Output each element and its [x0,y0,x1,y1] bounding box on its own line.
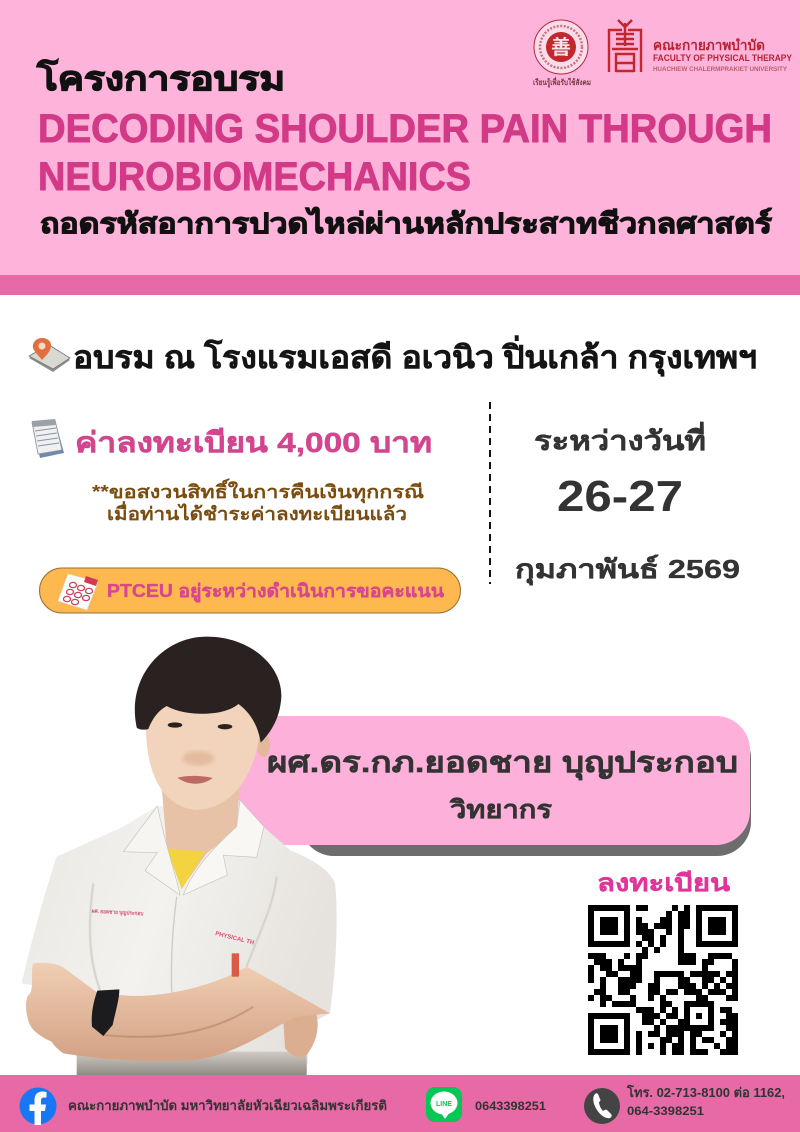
footer: phone numbers [626,1084,785,1118]
pocket emblem [232,953,239,977]
shirt [167,848,205,889]
speaker role: วิทยากร [449,796,553,824]
right hand behind [283,1010,318,1057]
icon: notepad [32,419,64,458]
footer: line id: 0643398251 [475,1099,546,1113]
venue: อบรม ณ โรงแรมเอสดี อเวนิว ปิ่นเกล้า กรุงเทพฯ [73,335,757,377]
title: English: NEUROBIOMECHANICS [38,155,471,199]
forearm and left hand [26,963,330,1061]
footer band [0,1075,800,1132]
footer: phone numbers: โทร. 02-713-8100 ต่อ 1162, [626,1084,785,1100]
speaker name: ผศ.ดร.กภ.ยอดชาย บุญประกอบ [267,747,738,780]
faculty logo mark [609,20,641,72]
coat [22,800,337,1075]
ear [257,733,270,757]
dashed divider [489,402,491,584]
title: English: DECODING SHOULDER PAIN THROUGH [38,107,772,151]
event dates: 26-27 [557,472,683,521]
faculty name: คณะกายภาพบำบัด [653,37,765,53]
face [146,690,260,810]
university seal logo: เรียนรู้เพื่อรับใช้สังคม [533,76,591,88]
icon: facebook [20,1088,56,1125]
collars [123,806,180,895]
faculty name: FACULTY OF PHYSICAL THERAPY [653,53,792,63]
university seal logo [533,20,591,88]
event dates: ระหว่างวันที่ [534,421,706,456]
icon: LINE: LINE [436,1101,452,1108]
event dates [515,421,740,586]
PTCEU pill [40,568,460,613]
hair [135,637,281,743]
event dates: กุมภาพันธ์ 2569 [515,554,740,586]
title: Thai subtitle: ถอดรหัสอาการปวดไหล่ผ่านหลักประสาทชีวกลศาสตร์ [40,207,772,239]
faculty name: HUACHIEW CHALERMPRAKIET UNIVERSITY [653,66,788,73]
faculty name [653,37,792,73]
header band [0,0,800,295]
eyes [168,722,232,729]
icon: LINE [426,1087,462,1122]
university seal logo: 善 [551,36,571,59]
refund note [92,478,424,524]
refund note: เมื่อท่านได้ชำระค่าลงทะเบียนแล้ว [107,501,407,524]
neck [162,780,240,888]
icon: map pin [29,338,70,372]
registration fee: ค่าลงทะเบียน 4,000 บาท [75,427,432,458]
QR code [591,908,735,1052]
title: programme label: โครงการอบรม [36,59,285,97]
icon: checklist sheet [58,574,98,610]
pocket label: PHYSICAL TH [215,931,255,947]
footer: faculty name: คณะกายภาพบำบัด มหาวิทยาลัยหัวเฉียวเฉลิมพระเกียรติ [68,1098,387,1113]
speaker photo illustration [22,637,337,1075]
footer: phone numbers: 064-3398251 [627,1104,704,1118]
watch [92,989,119,1036]
refund note: **ขอสงวนสิทธิ์ในการคืนเงินทุกกรณี [92,478,424,504]
registration heading: ลงทะเบียน [597,870,731,897]
lips [177,776,213,784]
name embroidery: ผศ. ยอดชาย บุญประกอบ [92,907,144,917]
icon: phone [584,1088,620,1124]
title: English [38,107,772,199]
PTCEU pill: PTCEU อยู่ระหว่างดำเนินการขอคะแนน [107,581,445,603]
speaker card [200,716,751,856]
